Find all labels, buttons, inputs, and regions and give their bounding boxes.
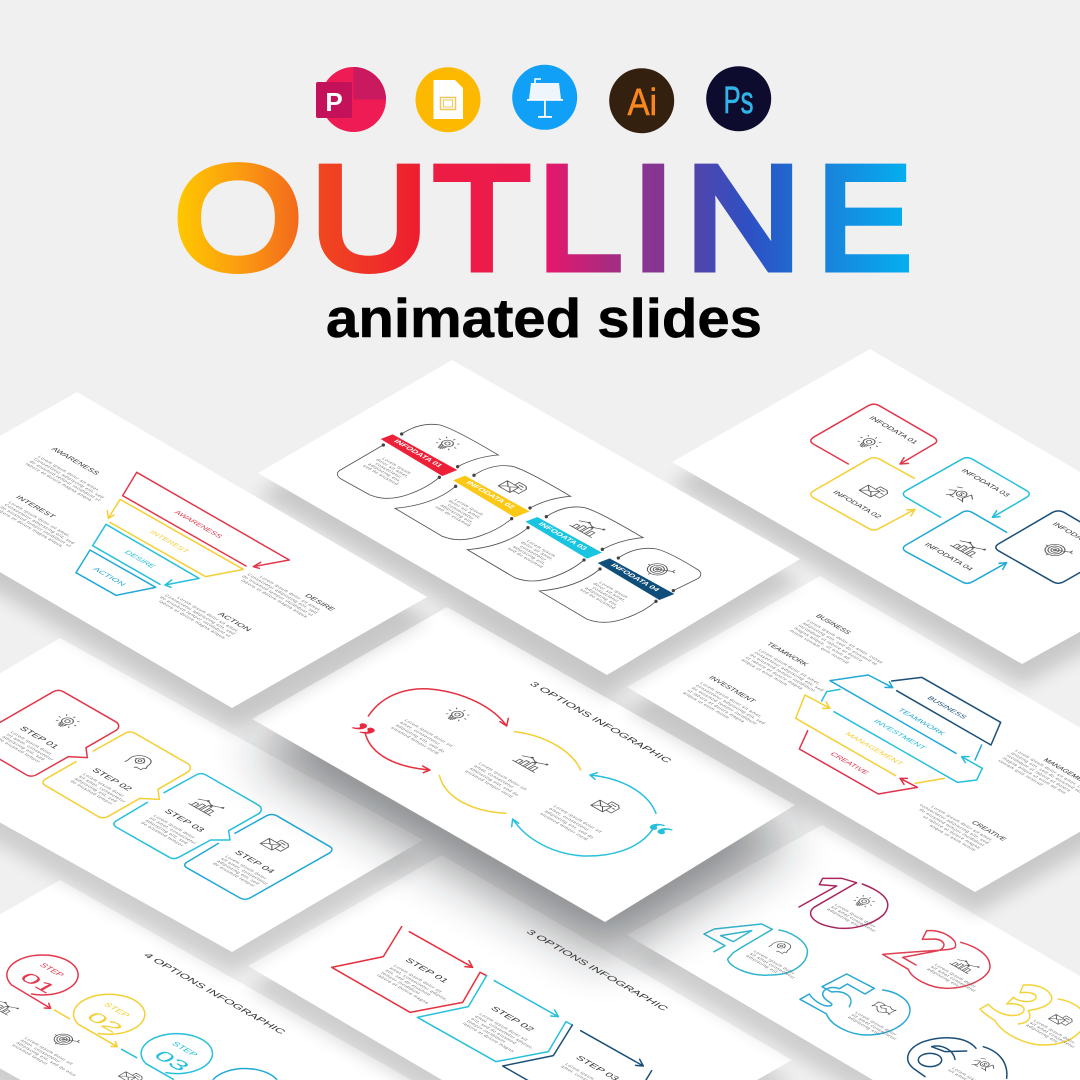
awareness text: Lorem ipsum dolor sit amet, [37, 455, 102, 492]
step 03 arrow shape [503, 1025, 652, 1080]
step 01 label: STEP 01 [403, 957, 451, 985]
red quote mark: ” [330, 717, 386, 749]
investment text: INVESTMENT [707, 675, 757, 704]
body text 1: Lorem ipsum dolor sit [404, 718, 455, 748]
management band [796, 695, 944, 783]
body text 2: eiusmod tempor incid. [464, 769, 517, 799]
card: step 03: STEP 03 [162, 808, 207, 834]
management text: magna aliqua ut enim ad min [1002, 756, 1068, 794]
step 03 marker: STEP [169, 1040, 200, 1058]
step 01 arrow shape [332, 927, 487, 1012]
icon: chart [513, 752, 548, 773]
action text: Lorem ipsum dolor sit amet, [176, 596, 241, 633]
investment text: consectetur adipiscing elit, sed [695, 684, 768, 725]
module: infodata 04: adipiscing elit, [584, 586, 621, 607]
card: step 02 [43, 732, 190, 818]
business band [892, 677, 1001, 745]
number 2 outline [883, 931, 990, 988]
step 03 body: Lorem ipsum [565, 1062, 596, 1080]
body text 1: sit amet consectetur [830, 905, 879, 933]
teamwork text: do eiusmod tempor incididunt [749, 653, 818, 692]
card: infodata 02 [811, 458, 915, 530]
business text: BUSINESS [814, 614, 852, 636]
module: infodata 04: sed do eiusmod [579, 588, 618, 610]
body text 1: amet, consectetur [399, 721, 443, 745]
funnel: desire: DESIRE [122, 550, 157, 570]
module: infodata 01: INFODATA 01 [392, 439, 444, 469]
creative text: consectetur adipiscing elit, sed [919, 803, 991, 844]
step 01 body: Lorem ipsum dolor sit [393, 964, 444, 993]
card: step 03 [114, 774, 261, 859]
step 02 label: STEP 02 [488, 1005, 537, 1033]
panel: slide 3 options loop [252, 607, 795, 957]
icon: mail [591, 797, 622, 815]
creative band [799, 731, 917, 794]
step 02 body: labore et dolore magna [462, 1022, 517, 1053]
card: step 03: adipiscing elit, sed [145, 819, 190, 845]
body text 3: Lorem ipsum dolor [1033, 1019, 1077, 1044]
body text 2: adipiscing elit, sed do [469, 767, 521, 796]
body text 4: sit amet consectetur [749, 952, 798, 979]
heading: 4 options: 4 OPTIONS INFOGRAPHIC [141, 952, 289, 1036]
module: infodata 01 [337, 424, 498, 498]
investment band [822, 689, 982, 782]
body text 4: adipiscing elit [745, 954, 780, 974]
cyan arcs [512, 773, 656, 856]
interest text [0, 495, 82, 550]
body text 1: Lorem ipsum dolor [834, 903, 878, 928]
card: infodata 02: INFODATA 02 [831, 490, 883, 520]
step 04 marker [213, 1069, 277, 1079]
module: infodata 02: INFODATA 02 [464, 480, 516, 510]
icon: powerpoint: P [325, 87, 343, 117]
desire text: labore et dolore magna aliqua. [240, 578, 311, 619]
business band: BUSINESS [925, 696, 968, 720]
body text 3: amet, consectetur [548, 807, 592, 831]
management band: MANAGEMENT [843, 732, 904, 767]
number 1 outline [799, 878, 888, 928]
card: step 01: sit amet, consectetur [6, 732, 56, 761]
icon: target [47, 1031, 81, 1050]
card: infodata 05 [996, 511, 1080, 583]
title: U [310, 136, 429, 301]
icon: chart [0, 998, 19, 1015]
card: infodata 01: INFODATA 01 [867, 416, 919, 445]
card: step 01: adipiscing elit, sed [2, 735, 47, 761]
module: infodata 01: Lorem ipsum [381, 457, 413, 475]
module: infodata 02: consectetur [447, 503, 476, 520]
body text: amet, consectetur [20, 1038, 63, 1063]
desire text [237, 570, 336, 619]
funnel: interest [107, 499, 243, 577]
module: infodata 02: dolor sit amet, [448, 499, 484, 519]
module: infodata 02 [395, 466, 571, 540]
business text: magna aliqua, ut enim ad [793, 626, 852, 660]
step 01 body: amet, consectetur adipisc, [389, 966, 450, 1001]
panel: slide numbered outlines [627, 825, 1080, 1080]
title: L [538, 135, 622, 301]
card: step 04: do eiusmod tempor [212, 862, 258, 888]
body text 1: adipiscing elit, sed do [395, 723, 447, 753]
action text [155, 591, 253, 640]
module: infodata 01: dolor sit amet, [375, 458, 411, 478]
card: step 02: do eiusmod tempor [70, 779, 115, 805]
business text: Lorem ipsum dolor sit amet, conse [806, 619, 885, 664]
step 02 marker [54, 994, 145, 1047]
body text 5: adipiscing elit [847, 1015, 882, 1035]
funnel: action [76, 550, 156, 595]
teamwork text: Lorem ipsum dolor sit amet, [758, 648, 823, 685]
panel: slide infodata timeline [258, 360, 800, 697]
body text: adipiscing elit, sed do eius [16, 1041, 79, 1077]
number 3 outline [980, 985, 1080, 1045]
body text: Lorem ipsum dolor sit [24, 1036, 75, 1066]
creative text: aliqua ut enim minim [929, 824, 978, 852]
number 4 outline [704, 924, 807, 975]
funnel: action: ACTION [91, 567, 127, 587]
module: infodata 04: Lorem ipsum [598, 581, 630, 599]
module: infodata 02: Lorem ipsum [454, 498, 486, 516]
awareness text: labore et dolore magna aliqua. [25, 462, 96, 502]
body text: eiusmod tempor [11, 1043, 50, 1065]
body text 3: adipiscing elit, sed do [544, 809, 596, 839]
icon: keynote [512, 65, 577, 130]
body text 3: adipiscing elit [1025, 1023, 1060, 1043]
module: infodata 03 [467, 507, 643, 581]
heading: 3 options loop: 3 OPTIONS INFOGRAPHIC [527, 680, 675, 765]
icon: chart [950, 957, 980, 974]
card: step 02: sit amet, consectetur [78, 774, 128, 803]
card: step 02: Lorem ipsum dolor [82, 772, 127, 798]
creative text: Lorem ipsum dolor sit amet, [930, 805, 995, 842]
creative band: CREATIVE [828, 752, 871, 776]
desire text: do eiusmod tempor incididunt ut [241, 574, 316, 617]
awareness text [25, 447, 111, 504]
teamwork text: consectetur adipiscing elit, sed [754, 651, 826, 692]
module: infodata 01: sed do eiusmod [362, 464, 401, 486]
icon: google slides [416, 67, 480, 132]
action text: do eiusmod tempor incididunt ut [159, 595, 233, 638]
card: step 03: Lorem ipsum dolor [153, 814, 197, 839]
creative text: ut labore et dolore magna [922, 815, 982, 849]
body text 3: sit amet consectetur [1029, 1021, 1078, 1049]
module: infodata 01: consectetur [375, 462, 404, 479]
interest text: INTEREST [14, 495, 56, 519]
management text [997, 749, 1080, 806]
card: step 01: STEP 01 [17, 725, 62, 750]
awareness text: do eiusmod tempor incididunt ut [29, 460, 103, 502]
interest text: Lorem ipsum dolor sit amet, [8, 500, 73, 538]
card: infodata 04 [903, 511, 1007, 583]
investment text: aliqua ut enim minim [682, 691, 732, 719]
module: infodata 03: adipiscing elit, [512, 545, 548, 566]
card: step 04 [185, 814, 332, 899]
panel: slide 4 options infographic [0, 880, 415, 1080]
panel: slide steps cards [0, 638, 423, 974]
title: T [434, 136, 530, 301]
card: step 02: STEP 02 [90, 767, 135, 793]
teamwork text: ut labore et dolore magna [745, 656, 805, 690]
body text 2: adipiscing elit [926, 967, 961, 987]
title: I [632, 136, 675, 301]
funnel: awareness: AWARENESS [172, 510, 224, 540]
card: infodata 04: INFODATA 04 [922, 542, 974, 572]
investment band: INVESTMENT [871, 719, 927, 751]
card: infodata 01 [811, 404, 937, 464]
step 01 marker: STEP [37, 962, 66, 978]
card: infodata 03: INFODATA 03 [959, 468, 1011, 498]
card: step 02: adipiscing elit, sed [74, 777, 119, 803]
icon: head [768, 939, 795, 955]
module: infodata 04: INFODATA 04 [609, 563, 661, 593]
body text 3: Lorem ipsum dolor sit [553, 804, 604, 834]
title [174, 135, 912, 301]
icon: handshake [869, 1001, 897, 1016]
card: step 04: STEP 04 [232, 849, 278, 875]
card: step 04: Lorem ipsum dolor [225, 854, 269, 880]
interest text: Consectetur adipiscing elit, sed [4, 503, 77, 545]
body text 4: Lorem ipsum dolor [753, 949, 797, 975]
icon: bulb [850, 893, 878, 909]
action text: ACTION [216, 612, 253, 633]
investment text: do eiusmod tempor incididunt [691, 686, 759, 725]
module: infodata 01: adipiscing elit, [367, 462, 404, 483]
step 01 marker: 01 [15, 969, 62, 996]
investment text: ut labore et dolore magna [687, 689, 747, 723]
step 01 body: labore et dolore magna [376, 973, 431, 1004]
module: infodata 03: consectetur [519, 544, 549, 561]
step 03 label: STEP 03 [573, 1054, 622, 1080]
heading: 3 options: 3 OPTIONS INFOGRAPHIC [524, 928, 672, 1013]
module: infodata 02: sed do eiusmod [435, 505, 473, 527]
business text [789, 614, 885, 674]
module: infodata 03: Lorem ipsum [526, 539, 558, 557]
management text: veniam quis nostrud [997, 759, 1045, 786]
yellow arcs [439, 732, 581, 813]
title: O [174, 136, 303, 301]
body text 2: sit amet consectetur [930, 965, 979, 993]
step 03 marker: 03 [149, 1047, 195, 1074]
teamwork text [741, 642, 830, 699]
body text 3: eiusmod tempor incid. [539, 812, 592, 842]
step 02 body: tempor incididunt [466, 1019, 508, 1043]
teamwork band: TEAMWORK [896, 708, 947, 737]
funnel: interest: INTEREST [148, 530, 190, 554]
action text: labore et dolore magna aliqua. [158, 599, 229, 640]
step 01 body: tempor incididunt [380, 971, 422, 995]
icon: photoshop: Ps [724, 80, 754, 122]
module: infodata 04: consectetur [592, 586, 621, 603]
icon: powerpoint [316, 67, 386, 132]
card: step 03: do eiusmod tempor [140, 821, 186, 847]
card: step 04: sit amet, consectetur [220, 857, 270, 885]
desire text: Consectetur adipiscing elit, sed [246, 572, 320, 614]
teamwork band [830, 675, 982, 760]
business text: adipiscing elit, sed do eiusmod te [802, 621, 879, 666]
panel: slide infodata diamonds [672, 349, 1080, 686]
icon: mail [118, 1070, 144, 1080]
cyan quote mark: “ [626, 816, 682, 848]
creative text: CREATIVE [969, 820, 1008, 842]
body text 5: Lorem ipsum dolor [855, 1011, 899, 1036]
awareness text: Consectetur adipiscing elit, sed [33, 457, 106, 499]
module: infodata 02: adipiscing elit, [440, 503, 476, 524]
creative text: do eiusmod tempor incididunt [919, 808, 987, 847]
body text 2: Lorem ipsum dolor sit [478, 761, 529, 791]
interest text: do eiusmod tempor incididunt ut [0, 505, 74, 548]
card: step 03: sit amet, consectetur [149, 816, 199, 845]
step 01 body: elit, sed do eiusmod [385, 969, 433, 996]
step 02 body: amet, consectetur adipisc, [474, 1014, 536, 1050]
step 02 marker: STEP [101, 1001, 132, 1019]
business text: minim veniam quis nostrud [789, 629, 851, 664]
desire text: DESIRE [303, 593, 336, 613]
creative text [906, 801, 1008, 852]
body text 1: adipiscing elit [826, 907, 861, 927]
funnel: awareness [123, 472, 289, 568]
icon: photoshop [706, 66, 771, 131]
card: infodata 03 [903, 458, 1029, 517]
teamwork text: TEAMWORK [764, 642, 810, 668]
number 5 outline [800, 974, 910, 1035]
step 02 body: elit, sed do eiusmod [470, 1017, 519, 1044]
body text 2: Lorem ipsum dolor [934, 963, 978, 988]
business text: incididunt ut labore et dolore [798, 624, 865, 662]
icon: illustrator [609, 68, 674, 133]
icon: bulb [441, 706, 473, 724]
title: N [685, 135, 802, 301]
panel: slide 3 options steps [248, 855, 792, 1080]
step 01 marker [7, 955, 78, 1008]
card: step 04: adipiscing elit, sed [216, 859, 262, 885]
management text: incididunt ut labore et dolore [1006, 754, 1073, 792]
module: infodata 04: dolor sit amet, [592, 582, 628, 602]
icon: mail [1048, 1012, 1074, 1027]
icon: hands [970, 1057, 998, 1073]
module: infodata 03: dolor sit amet, [520, 540, 556, 561]
body text 1: eiusmod tempor incid. [390, 726, 443, 756]
investment text: Lorem ipsum dolor sit amet, [700, 681, 765, 718]
card: step 01: Lorem ipsum dolor [10, 730, 54, 756]
action text: Consectetur adipiscing elit, sed [164, 593, 237, 635]
body text 5: sit amet consectetur [851, 1013, 899, 1041]
desire text: Lorem ipsum dolor sit amet, [259, 575, 324, 612]
panel: slide funnel [0, 392, 427, 730]
subtitle: animated slides [326, 287, 762, 349]
red arcs [365, 689, 508, 773]
module: infodata 03: INFODATA 03 [536, 522, 588, 551]
funnel: desire [93, 524, 199, 587]
investment text [682, 675, 772, 732]
step 03 marker [122, 1034, 212, 1079]
module: infodata 03: sed do eiusmod [507, 546, 545, 568]
icon: illustrator: Ai [628, 82, 657, 124]
body text 2: amet, consectetur [473, 764, 517, 789]
title: E [817, 135, 912, 301]
number 6 outline [908, 1038, 1007, 1078]
panel: slide octagon list [627, 576, 1080, 914]
card: step 01 [0, 690, 119, 776]
step 02 marker: 02 [82, 1009, 128, 1036]
step 02 arrow shape [417, 976, 572, 1062]
step 02 body: Lorem ipsum dolor sit [479, 1012, 530, 1042]
module: infodata 04 [539, 548, 701, 622]
awareness text: AWARENESS [49, 447, 101, 476]
teamwork text: aliqua ut enim minim [741, 658, 790, 686]
